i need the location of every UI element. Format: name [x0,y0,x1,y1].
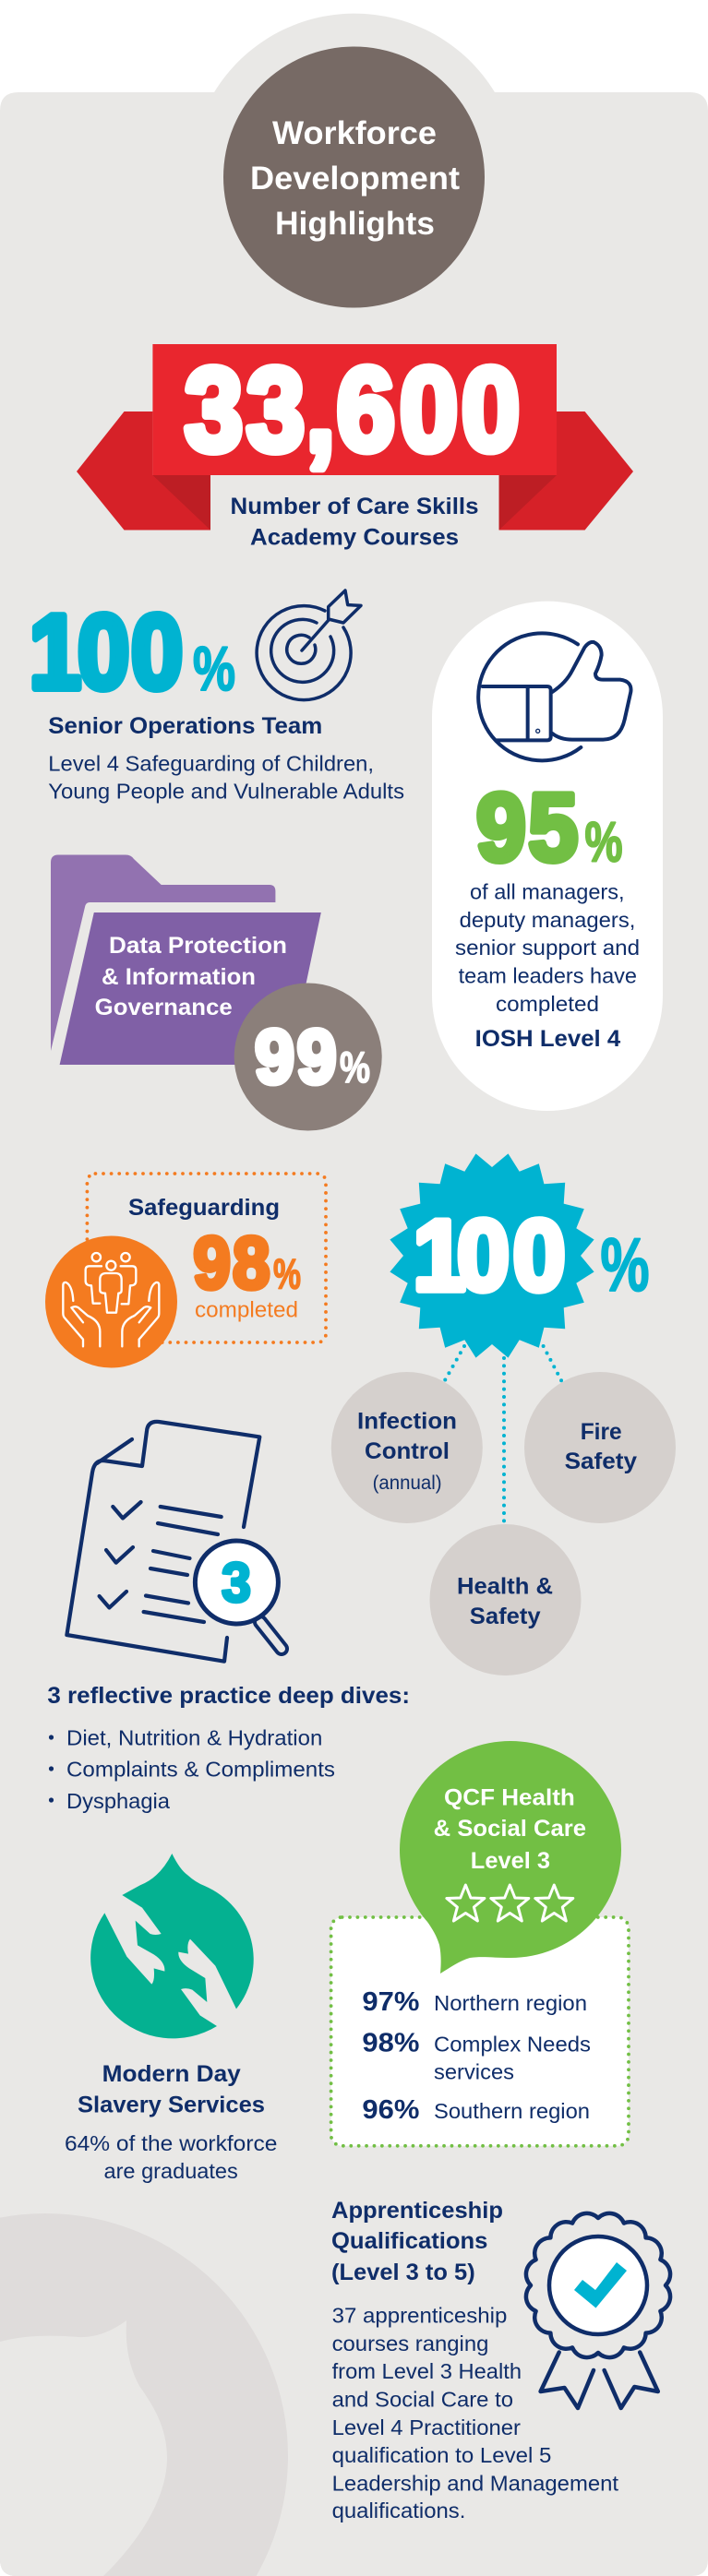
folder: data protection 99%: & Information [102,964,256,990]
speech bubble: QCF Health and Social Care Level 3 [400,1741,621,1974]
panel: safeguarding 98%: % [273,1249,301,1297]
stat: 100% senior operations team: Young People and Vulnerable Adults [48,779,404,803]
panel: QCF results box [331,1917,629,2146]
ribbon banner: 33,600 courses: Number of Care Skills [231,494,478,519]
panel: safeguarding 98% [45,1174,326,1367]
icon: hands holding people [45,1236,177,1367]
text: apprenticeship qualifications: and Social Care to [332,2388,513,2412]
text: apprenticeship qualifications: 37 apprenticeship [332,2304,507,2328]
ribbon banner: 33,600 courses [77,344,633,550]
text: apprenticeship qualifications: qualification to Level 5 [332,2443,551,2467]
circle: health and safety: Health & [457,1574,553,1600]
panel: 95% IOSH pill: of all managers, [470,880,625,904]
stat: 100% senior operations team: Level 4 Safeguarding of Children, [48,751,374,775]
panel: 95% IOSH pill: senior support and [455,936,640,960]
circle: fire safety: Fire [581,1419,622,1445]
text: reflective practice deep dives: Dysphagia [66,1789,170,1813]
title badge: Development [250,161,460,197]
panel: 95% IOSH pill: completed [496,992,599,1016]
text: apprenticeship qualifications: qualifications. [332,2498,465,2522]
panel: 95% IOSH pill: % [585,810,622,873]
panel: QCF results box: Northern region [434,1991,587,2015]
panel: 95% IOSH pill: IOSH Level 4 [475,1026,620,1052]
title badge [223,46,485,308]
circle: health and safety: Safety [470,1604,541,1629]
text: modern day slavery services: Slavery Services [78,2092,265,2117]
folder: data protection 99% [51,854,382,1131]
text: modern day slavery services: Modern Day [102,2061,241,2087]
stat: 100% senior operations team: Senior Operations Team [48,713,322,739]
circle: fire safety [524,1372,676,1523]
dotted connectors [445,1346,562,1522]
text: reflective practice deep dives [47,1683,410,1813]
panel: 95% IOSH pill: 95 [476,774,578,881]
text: reflective practice deep dives: 3 reflective practice deep dives: [47,1683,410,1709]
text: apprenticeship qualifications [331,2198,619,2522]
speech bubble: QCF Health and Social Care Level 3: & Social Care [434,1816,586,1842]
text: modern day slavery services: are graduates [103,2159,238,2183]
text: modern day slavery services: 64% of the workforce [65,2131,277,2155]
text: apprenticeship qualifications: Apprenticeship [331,2198,503,2224]
panel: QCF results box: services [434,2059,514,2083]
panel: safeguarding 98%: completed [195,1297,298,1323]
title badge: Highlights [275,206,435,242]
panel: QCF results box: 97% [362,1987,420,2017]
folder: data protection 99%: % [340,1043,370,1091]
starburst: 100%: 100 [414,1199,566,1312]
starburst: 100%: % [600,1223,650,1307]
panel: 95% IOSH pill: team leaders have [459,964,637,988]
text: apprenticeship qualifications: Level 4 Practitioner [332,2415,521,2439]
icon: target and arrow [257,590,361,700]
circle: infection control [331,1372,483,1523]
folder: data protection 99%: 99 [255,1013,336,1099]
panel: safeguarding 98%: 98 [193,1222,270,1305]
circle: fire safety: Safety [565,1449,637,1474]
text: apprenticeship qualifications: from Level 3 Health [332,2359,522,2383]
title badge: Workforce [272,115,437,151]
text: reflective practice deep dives: Diet, Nutrition & Hydration [66,1726,322,1750]
ribbon banner: 33,600 courses: Academy Courses [250,524,459,550]
text: reflective practice deep dives: Complaints & Compliments [66,1758,335,1782]
stat: 100% senior operations team: 100 [30,592,183,710]
folder: data protection 99%: Data Protection [109,933,287,959]
speech bubble: QCF Health and Social Care Level 3: Level 3 [471,1848,550,1874]
ribbon banner: 33,600 courses: 33,600 [185,344,520,476]
circle: health and safety [430,1524,582,1676]
icon: thumbs up [478,633,631,760]
circle: infection control: (annual) [373,1473,442,1494]
stat: 100% senior operations team [30,590,404,803]
folder: data protection 99%: Governance [95,995,233,1020]
panel: QCF results box: Southern region [434,2099,590,2123]
icon: checklist with magnifier: 3 [222,1552,251,1614]
panel: 95% IOSH pill: deputy managers, [460,908,635,932]
panel: QCF results box: 96% [362,2095,420,2125]
panel: safeguarding 98%: Safeguarding [128,1195,280,1221]
circle: infection control: Control [365,1438,450,1464]
text: apprenticeship qualifications: (Level 3 to 5) [331,2260,475,2285]
icon: rosette award with check [526,2213,670,2408]
text: apprenticeship qualifications: courses ranging [332,2332,488,2355]
stat: 100% senior operations team: % [193,634,235,704]
text: apprenticeship qualifications: Qualifications [331,2228,487,2254]
icon: teal drop with hands [90,1854,254,2038]
text: modern day slavery services [65,2061,277,2183]
panel: QCF results box: 98% [362,2029,420,2058]
panel: QCF results box: Complex Needs [434,2033,591,2057]
decorative drop watermark [0,2213,288,2576]
icon: three stars [447,1885,573,1921]
text: apprenticeship qualifications: Leadership and Management [332,2471,619,2495]
starburst: 100% [390,1153,650,1358]
circle: infection control: Infection [357,1408,457,1434]
speech bubble: QCF Health and Social Care Level 3: QCF Health [444,1784,575,1810]
icon: checklist with magnifier [66,1422,282,1662]
panel: 95% IOSH pill [432,602,663,1111]
